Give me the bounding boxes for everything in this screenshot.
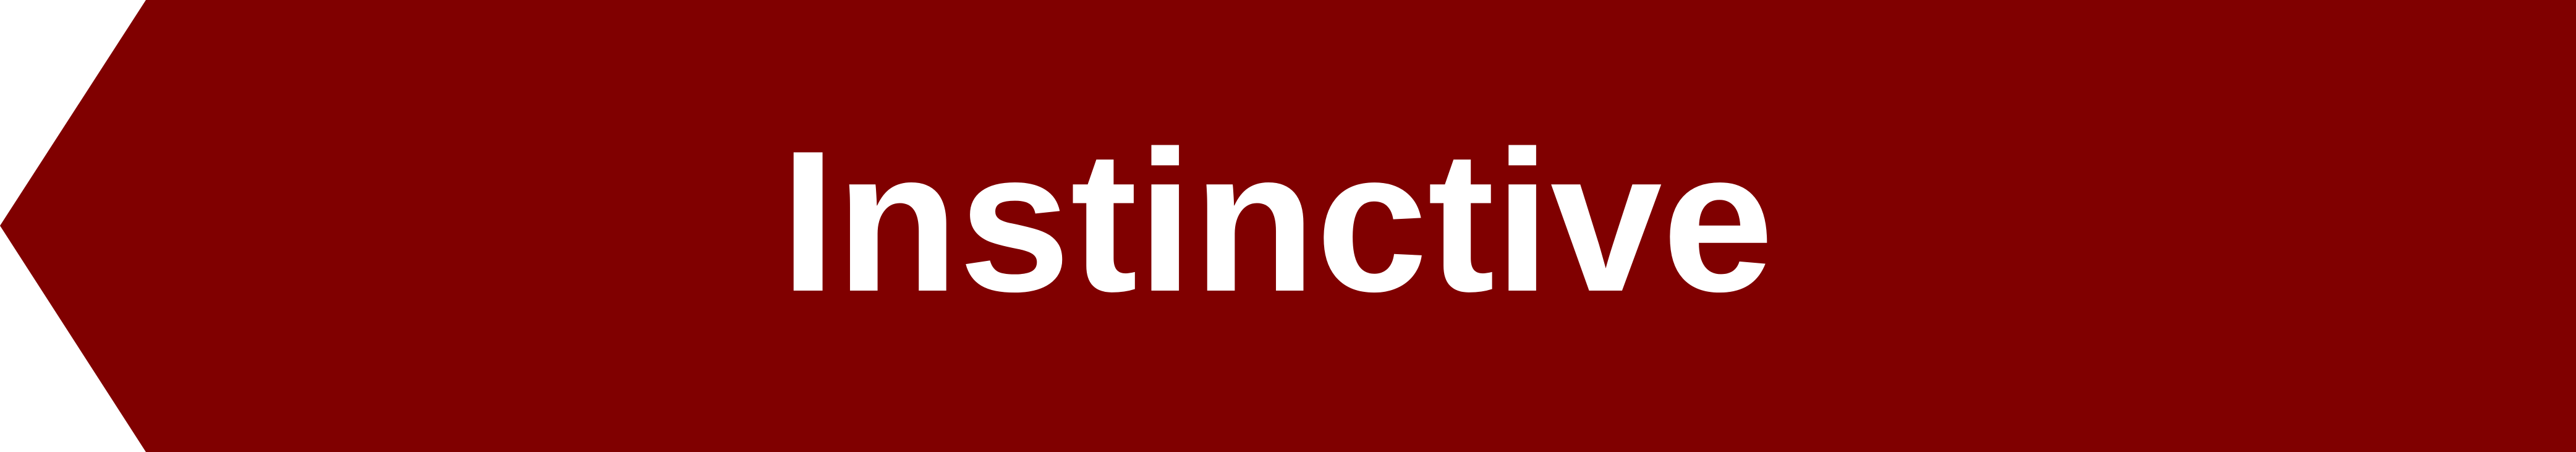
- title: Instinctive: Instinctive: [780, 109, 1774, 333]
